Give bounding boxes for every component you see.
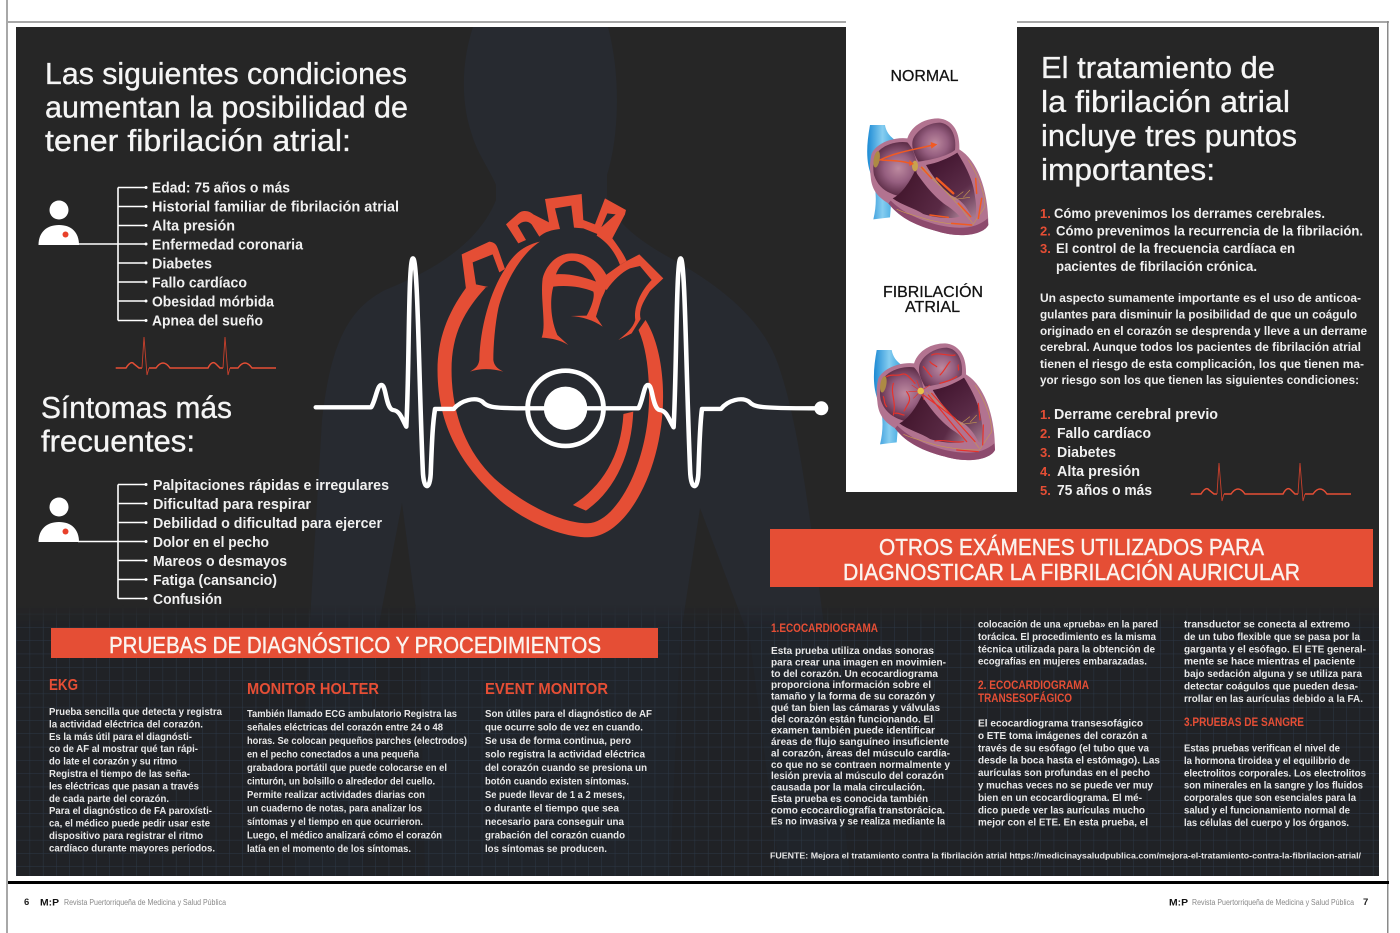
section: blood tests: Estas pruebas verifican el nivel de — [1184, 744, 1340, 754]
section: EKG: dispositivo para registrar el ritmo — [49, 831, 203, 842]
footer right: Revista Puertorriqueña de Medicina y Salud Pública — [1192, 898, 1354, 907]
list: symptoms: Fatiga (cansancio) — [153, 573, 277, 589]
section: Holter monitor: grabadora portátil que puede colocarse en el — [247, 763, 447, 774]
section: transesophageal echocardiogram: aurículas son profundas en el pecho — [978, 768, 1150, 779]
heart outer wall — [438, 287, 663, 537]
heading: treatment: importantes: — [1041, 152, 1215, 187]
list: symptoms: Palpitaciones rápidas e irregulares — [153, 478, 389, 494]
list: symptoms: Dolor en el pecho — [153, 535, 269, 551]
list: risk factors: Diabetes — [152, 256, 212, 272]
illustration: fibrillating heart — [874, 343, 995, 460]
section: blood tests: transductor se conecta al extremo — [1184, 620, 1350, 630]
list: risk factors: Historial familiar de fibrilación atrial — [152, 200, 399, 216]
footer left: M:P — [40, 898, 60, 908]
section: blood tests: electrolitos corporales. Los electrolitos — [1184, 768, 1366, 779]
section: EKG: la actividad eléctrica del corazón. — [49, 719, 203, 730]
section: transesophageal echocardiogram: TRANSESOFÁGICO — [978, 692, 1072, 705]
section: Holter monitor: en el pecho conectados a una pequeña — [247, 750, 419, 760]
section: event monitor: Se puede llevar de 1 a 2 meses, — [485, 790, 625, 801]
heading: symptoms: Síntomas más — [41, 390, 232, 425]
arch opening — [556, 261, 596, 282]
section: transesophageal echocardiogram: 2. ECOCARDIOGRAMA — [978, 680, 1089, 692]
section: echocardiogram: para crear una imagen en movimien- — [771, 657, 946, 668]
text: anticoagulants paragraph: gulantes para disminuir la posibilidad de que un coágulo — [1040, 310, 1357, 322]
banner: other exams: DIAGNOSTICAR LA FIBRILACIÓN AURICULAR — [843, 559, 1300, 585]
list: treatment points: 3. — [1040, 241, 1051, 256]
list: symptoms: Dificultad para respirar — [153, 497, 311, 513]
section: EKG — [49, 677, 222, 854]
heart top vessels — [462, 194, 663, 372]
icon: small red ECG trace — [116, 337, 276, 375]
list: risk factors: Obesidad mórbida — [152, 294, 275, 310]
list: symptoms: Mareos o desmayos — [153, 554, 287, 570]
section: echocardiogram: qué tan bien las cámaras y válvulas — [771, 703, 940, 714]
footer right: M:P — [1169, 898, 1189, 908]
list: treatment points — [1040, 206, 1363, 274]
central heart outline with ECG — [316, 194, 828, 537]
list: risk factors: Enfermedad coronaria — [152, 238, 304, 254]
section: EKG: de cada parte del corazón. — [49, 794, 169, 805]
list: higher risk conditions: Diabetes — [1057, 445, 1116, 461]
section: blood tests: garganta y el esófago. El ETE general- — [1184, 644, 1366, 655]
section: event monitor: EVENT MONITOR — [485, 681, 608, 698]
section: blood tests: rrollar en las aurículas debido a la FA. — [1184, 694, 1363, 705]
section: EKG: ca, el médico puede pedir usar este — [49, 819, 210, 830]
section: echocardiogram: Es no invasiva y se realiza mediante la — [771, 817, 945, 828]
section: transesophageal echocardiogram: El ecocardiograma transesofágico — [978, 718, 1143, 730]
list: treatment points: El control de la frecuencia cardíaca en — [1056, 241, 1295, 256]
section: Holter monitor: señales eléctricas del corazón entre 24 o 48 — [247, 722, 443, 734]
ECG end dot — [814, 401, 828, 415]
section: blood tests: detectar coágulos que pueden desa- — [1184, 682, 1358, 692]
section: event monitor: los síntomas se producen. — [485, 844, 607, 855]
section: transesophageal echocardiogram: técnica utilizada para la obtención de — [978, 644, 1155, 655]
list: symptoms: Debilidad o dificultad para ejercer — [153, 516, 382, 532]
section: event monitor: solo registra la actividad eléctrica — [485, 750, 645, 760]
list: treatment points: Cómo prevenimos los derrames cerebrales. — [1054, 206, 1325, 221]
section: transesophageal echocardiogram — [978, 620, 1160, 829]
text: anticoagulants paragraph: yor riesgo son los que tienen las siguientes condiciones: — [1040, 375, 1359, 387]
heading: conditions — [45, 56, 408, 158]
section: Holter monitor: latía en el momento de los síntomas. — [247, 844, 411, 855]
footer left: 6 — [24, 897, 29, 908]
section: echocardiogram: lesión previa al músculo del corazón — [771, 771, 944, 782]
section: EKG: cardíaco durante mayores períodos. — [49, 843, 215, 854]
section: blood tests: de un tubo flexible que se pasa por la — [1184, 632, 1360, 643]
tree connector: symptoms — [78, 483, 148, 600]
section: EKG: Prueba sencilla que detecta y registra — [49, 707, 222, 718]
inner arch — [542, 253, 607, 345]
list: risk factors: Apnea del sueño — [152, 314, 263, 330]
section: echocardiogram: examen también puede identificar — [771, 726, 935, 737]
list: higher risk conditions: Alta presión — [1057, 464, 1140, 480]
right vessel — [597, 254, 663, 340]
silhouette: right arm gap — [670, 508, 780, 876]
heading: conditions: Las siguientes condiciones — [45, 56, 407, 91]
heading: conditions: tener fibrilación atrial: — [45, 123, 351, 158]
list: risk factors: Fallo cardíaco — [152, 276, 247, 292]
banner: diagnostic tests: PRUEBAS DE DIAGNÓSTICO Y PROCEDIMIENTOS — [109, 632, 601, 658]
section: blood tests — [1184, 620, 1366, 829]
section: Holter monitor: Permite realizar actividades diarias con — [247, 790, 425, 801]
icon: small red ECG trace right — [1191, 463, 1351, 501]
footer right: 7 — [1363, 897, 1368, 908]
footer left — [24, 897, 226, 908]
section: Holter monitor: síntomas y el tiempo en que ocurrieron. — [247, 817, 423, 828]
icon: person with heart dot, symptoms — [38, 498, 79, 542]
white column for hearts — [846, 0, 1017, 492]
list: treatment points: 1. — [1040, 206, 1051, 221]
footer right — [1169, 897, 1368, 908]
ECG centre ring — [528, 371, 603, 446]
section: echocardiogram: proporciona información sobre el — [771, 680, 931, 691]
vein tube — [462, 242, 505, 289]
list: higher risk conditions: 75 años o más — [1057, 483, 1152, 499]
list: symptoms — [153, 478, 389, 608]
section: transesophageal echocardiogram: o ETE toma imágenes del corazón a — [978, 731, 1147, 742]
section: blood tests: las células del cuerpo y los órganos. — [1184, 818, 1349, 829]
section: Holter monitor — [247, 681, 467, 855]
heading: treatment: El tratamiento de — [1041, 50, 1275, 85]
silhouette: left arm gap — [362, 503, 425, 876]
section: event monitor: del corazón cuando se presiona un — [485, 763, 647, 774]
section: Holter monitor: horas. Se colocan pequeños parches (electrodos) — [247, 736, 467, 747]
list: higher risk conditions: 1. — [1040, 407, 1051, 422]
section: transesophageal echocardiogram: dico puede ver las aurículas mucho — [978, 805, 1145, 816]
heading: conditions: aumentan la posibilidad de — [45, 90, 408, 124]
section: transesophageal echocardiogram: torácica. El procedimiento es la misma — [978, 632, 1156, 643]
section: blood tests: 3.PRUEBAS DE SANGRE — [1184, 717, 1304, 729]
section: echocardiogram: co que no se contraen normalmente y — [771, 760, 950, 771]
section: Holter monitor: MONITOR HOLTER — [247, 681, 379, 698]
label: atrial fibrillation — [883, 282, 983, 316]
section: event monitor: Son útiles para el diagnóstico de AF — [485, 709, 652, 720]
section: event monitor: Se usa de forma continua, pero — [485, 736, 631, 747]
section: Holter monitor: También llamado ECG ambulatorio Registra las — [247, 709, 457, 720]
section: EKG: EKG — [49, 677, 78, 694]
section: echocardiogram: to del corazón. Un ecocardiograma — [771, 669, 938, 680]
section: blood tests: corporales que son esenciales para la — [1184, 793, 1356, 804]
heading: symptoms: frecuentes: — [41, 424, 195, 458]
section: echocardiogram: Esta prueba es conocida también — [771, 794, 928, 805]
section: EKG: Para el diagnóstico de FA paroxísti- — [49, 806, 212, 817]
section: EKG: les eléctricas que pasan a través — [49, 781, 199, 792]
text: anticoagulants paragraph: cerebral. Aunque todos los pacientes de fibrilación atrial — [1040, 342, 1361, 354]
illustration: normal heart — [867, 118, 988, 235]
section: event monitor: botón cuando existen síntomas. — [485, 776, 629, 788]
section: transesophageal echocardiogram: y muchas veces no se puede ver muy — [978, 780, 1153, 792]
label: atrial fibrillation: FIBRILACIÓN — [883, 282, 983, 301]
section: blood tests: salud y el funcionamiento normal de — [1184, 806, 1350, 816]
list: higher risk conditions: 5. — [1040, 483, 1051, 498]
section: transesophageal echocardiogram: mejor con el ETE. En esta prueba, el — [978, 818, 1148, 829]
section: blood tests: bajo sedación alguna y se utiliza para — [1184, 669, 1362, 680]
section: EKG: do late el corazón y su ritmo — [49, 757, 177, 768]
ECG white line — [316, 258, 821, 486]
section: Holter monitor: Luego, el médico analizará cómo el corazón — [247, 830, 442, 842]
silhouette: human torso — [296, 27, 850, 876]
ECG centre bar — [528, 402, 605, 415]
list: higher risk conditions: 3. — [1040, 445, 1051, 460]
list: higher risk conditions: Derrame cerebral previo — [1054, 407, 1218, 423]
section: transesophageal echocardiogram: colocación de una «prueba» en la pared — [978, 620, 1158, 630]
list: risk factors: Alta presión — [152, 218, 235, 234]
list: higher risk conditions: 4. — [1040, 464, 1051, 479]
section: event monitor: necesario para conseguir una — [485, 817, 624, 828]
section: blood tests: son minerales en la sangre y los fluidos — [1184, 781, 1363, 792]
heading: treatment — [1041, 50, 1297, 187]
heading: treatment: la fibrilación atrial — [1041, 84, 1290, 119]
heading: treatment: incluye tres puntos — [1041, 118, 1297, 153]
section: echocardiogram: como ecocardiografía transtorácica. — [771, 805, 945, 816]
section: transesophageal echocardiogram: bien en un ecocardiograma. El mé- — [978, 793, 1142, 804]
panel: lower grid band — [16, 605, 1379, 876]
footer left: Revista Puertorriqueña de Medicina y Salud Pública — [64, 898, 226, 907]
label: normal: NORMAL — [890, 68, 959, 85]
section: transesophageal echocardiogram: ecografías en mujeres embarazadas. — [978, 657, 1147, 668]
section: echocardiogram: al corazón, áreas del músculo cardía- — [771, 748, 950, 759]
icon: person with heart dot, risk factors — [38, 200, 79, 245]
section: echocardiogram: tamaño y la forma de su corazón y — [771, 692, 935, 702]
section: transesophageal echocardiogram: desde la boca hasta el estómago). Las — [978, 756, 1160, 767]
list: risk factors: Edad: 75 años o más — [152, 180, 290, 196]
section: echocardiogram: causada por la mala circulación. — [771, 783, 925, 794]
source line: FUENTE: Mejora el tratamiento contra la fibrilación atrial https://medicinaysaludpublica.com/mejora-el-tratamiento-contra-la-fibrilacion-atrial/ — [770, 850, 1362, 860]
list: higher risk conditions — [1040, 407, 1218, 499]
section: Holter monitor: cinturón, un bolsillo o alrededor del cuello. — [247, 776, 435, 788]
section: echocardiogram: del corazón están funcionando. El — [771, 714, 933, 725]
section: transesophageal echocardiogram: través de su esófago (el tubo que va — [978, 743, 1149, 754]
list: higher risk conditions: 2. — [1040, 426, 1051, 441]
section: EKG: Registra el tiempo de las seña- — [49, 769, 190, 780]
banner: other exams: OTROS EXÁMENES UTILIZADOS PARA — [879, 534, 1265, 560]
text: anticoagulants paragraph: originado en el corazón se desprenda y lleve a un derrame — [1040, 326, 1367, 338]
heart inner septum — [573, 412, 633, 511]
list: treatment points: 2. — [1040, 224, 1051, 238]
section: event monitor: o durante el tiempo que sea — [485, 804, 619, 814]
section: blood tests: la hormona tiroidea y el equilibrio de — [1184, 756, 1350, 767]
list: higher risk conditions: Fallo cardíaco — [1057, 426, 1151, 442]
section: event monitor: grabación del corazón cuando — [485, 830, 625, 842]
section: echocardiogram: 1.ECOCARDIOGRAMA — [771, 623, 878, 635]
text: anticoagulants paragraph — [1040, 293, 1367, 387]
aortic arch — [506, 194, 627, 265]
section: event monitor: que ocurre solo de vez en cuando. — [485, 722, 643, 734]
section: echocardiogram — [771, 623, 950, 828]
section: EKG: Es la más útil para el diagnósti- — [49, 732, 192, 743]
section: echocardiogram: áreas de flujo sanguíneo insuficiente — [771, 737, 949, 748]
banner: other exams — [770, 529, 1373, 587]
list: risk factors — [152, 180, 399, 330]
list: treatment points: pacientes de fibrilación crónica. — [1056, 259, 1257, 274]
list: symptoms: Confusión — [153, 592, 222, 608]
list: treatment points: Cómo prevenimos la recurrencia de la fibrilación. — [1056, 224, 1363, 238]
text: anticoagulants paragraph: Un aspecto sumamente importante es el uso de anticoa- — [1040, 293, 1361, 305]
septum column — [470, 242, 540, 372]
rule: footer divider — [8, 881, 1389, 884]
text: anticoagulants paragraph: tienen el riesgo de esta complicación, los que tienen ma- — [1040, 359, 1364, 371]
ECG centre dot — [544, 387, 587, 430]
tree connector: risk factors — [78, 186, 148, 322]
label: atrial fibrillation: ATRIAL — [905, 299, 960, 316]
section: EKG: co de AF al mostrar qué tan rápi- — [49, 744, 198, 755]
section: blood tests: mente se hace mientras el paciente — [1184, 657, 1355, 668]
section: echocardiogram: Esta prueba utiliza ondas sonoras — [771, 646, 934, 657]
section: Holter monitor: un cuaderno de notas, para analizar los — [247, 804, 422, 814]
heading: symptoms — [41, 390, 232, 458]
section: event monitor — [485, 681, 652, 855]
